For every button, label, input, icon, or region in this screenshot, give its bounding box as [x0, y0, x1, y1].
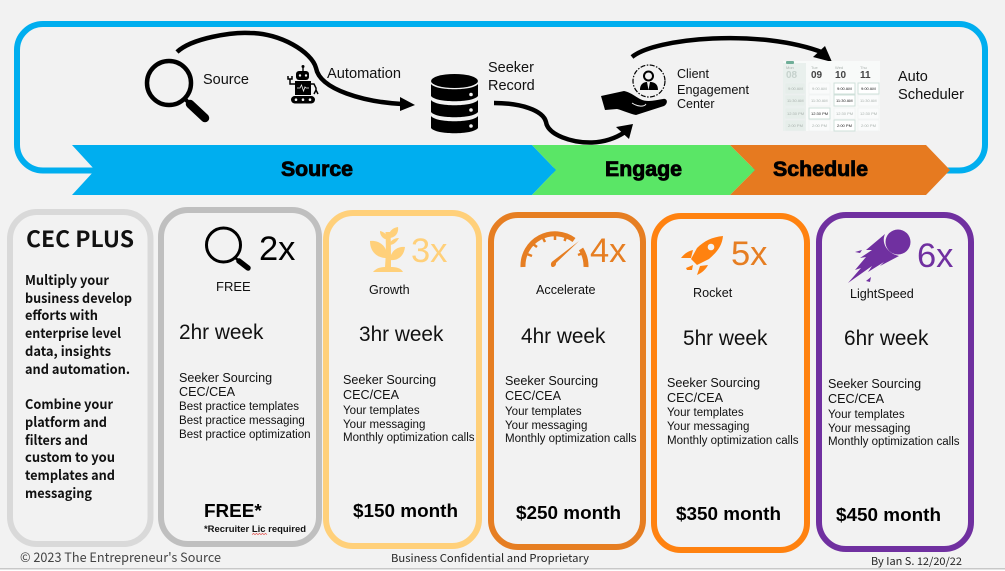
label: Auto Scheduler: Auto	[898, 69, 928, 85]
price: $250 month: $250 month	[516, 503, 621, 524]
icon: auto scheduler calendar: Wed	[835, 65, 843, 70]
label: Auto Scheduler	[898, 69, 964, 103]
icon: auto scheduler calendar: 12:30 PM	[811, 111, 828, 116]
feature list: Best practice messaging	[179, 415, 305, 427]
chevron: Engage	[532, 145, 755, 195]
label: Client Engagement Center: Center	[677, 97, 715, 111]
chevron: Source	[72, 145, 556, 195]
feature list	[828, 377, 960, 448]
hours: 2hr week: 2hr week	[179, 321, 264, 344]
feature list: Best practice optimization	[179, 429, 311, 441]
text: intro description: Multiply your	[25, 269, 109, 289]
price: FREE*: FREE*	[204, 501, 262, 522]
label: Automation: Automation	[327, 66, 401, 82]
feature list: Your templates	[667, 407, 744, 419]
icon: sprout	[370, 227, 405, 272]
icon: auto scheduler calendar: 08	[786, 70, 798, 81]
label: Seeker Record: Seeker	[488, 60, 534, 76]
feature list: Monthly optimization calls	[343, 432, 475, 444]
icon: seeker record database	[431, 74, 478, 133]
feature list: Seeker Sourcing	[828, 377, 921, 391]
icon: auto scheduler calendar: 12:30 PM	[787, 111, 804, 116]
panel: Accelerate tier	[491, 215, 643, 547]
feature list: Your templates	[828, 409, 905, 421]
feature list: Best practice templates	[179, 401, 299, 413]
multiplier: 3x: 3x	[411, 232, 447, 270]
icon: auto scheduler calendar: 2:00 PM	[812, 123, 827, 128]
icon: auto scheduler calendar: 12:30 PM	[836, 111, 853, 116]
icon: auto scheduler calendar: Tue	[811, 65, 819, 70]
text: intro description: efforts with	[25, 304, 98, 324]
tier name: Accelerate: Accelerate	[536, 283, 596, 297]
text: intro description: filters and	[25, 429, 88, 449]
icon: auto scheduler calendar: 2:00 PM	[837, 123, 852, 128]
panel: Rocket tier	[654, 216, 807, 550]
footer: copyright: © 2023 The Entrepreneur's Source	[20, 547, 221, 566]
label: Client Engagement Center	[677, 67, 750, 111]
icon: auto scheduler calendar: 10	[835, 70, 847, 81]
icon: auto scheduler calendar: 09	[811, 70, 823, 81]
icon: auto scheduler calendar: 11:30 AM	[836, 98, 853, 103]
icon: auto scheduler calendar: 9:00 AM	[788, 86, 803, 91]
icon: comet	[848, 230, 910, 283]
label: Client Engagement Center: Client	[677, 67, 709, 81]
panel: process flow frame	[17, 24, 985, 170]
feature list: Your messaging	[505, 420, 587, 432]
icon: auto scheduler calendar: 9:00 AM	[861, 86, 876, 91]
footer: author: By Ian S. 12/20/22	[871, 554, 962, 569]
feature list: Monthly optimization calls	[828, 436, 960, 448]
feature list: CEC/CEA	[179, 385, 236, 399]
multiplier: 2x: 2x	[259, 230, 295, 268]
note: recruiter license: *Recruiter Lic required	[204, 524, 306, 534]
panel: LightSpeed tier	[819, 215, 971, 549]
feature list: CEC/CEA	[505, 389, 562, 403]
icon: source magnifier	[147, 61, 205, 118]
feature list: Your templates	[343, 405, 420, 417]
label: Seeker Record: Record	[488, 78, 535, 94]
tier name: FREE: FREE	[216, 279, 251, 294]
multiplier: 4x: 4x	[590, 232, 626, 270]
feature list	[343, 373, 475, 444]
price: $350 month: $350 month	[676, 504, 781, 525]
price: $450 month: $450 month	[836, 505, 941, 526]
icon: auto scheduler calendar: 11:30 AM	[811, 98, 828, 103]
feature list	[667, 376, 799, 447]
chevron: Source: Source	[281, 158, 353, 181]
icon: speedometer gauge	[523, 234, 586, 267]
panel: CEC PLUS intro	[10, 212, 150, 544]
feature list: Seeker Sourcing	[343, 373, 436, 387]
text: intro description: enterprise level	[25, 322, 121, 342]
tier name: LightSpeed: LightSpeed	[850, 287, 914, 301]
text: intro description: platform and	[25, 411, 107, 431]
icon: magnifier	[206, 228, 248, 268]
label: Auto Scheduler: Scheduler	[898, 87, 964, 103]
icon: automation robot	[288, 65, 318, 104]
arrow: source to seeker record	[177, 33, 415, 111]
icon: auto scheduler calendar: 9:00 AM	[812, 86, 827, 91]
feature list	[179, 371, 311, 441]
footer: confidentiality: Business Confidential and Proprietary	[391, 550, 589, 566]
panel: FREE tier	[161, 210, 319, 544]
multiplier: 5x: 5x	[731, 235, 767, 273]
label: Client Engagement Center: Engagement	[677, 83, 750, 97]
hours: 3hr week: 3hr week	[359, 323, 444, 346]
panel: Growth tier	[326, 213, 479, 546]
icon: auto scheduler calendar: 11:30 AM	[860, 98, 877, 103]
label: Source: Source	[203, 72, 249, 88]
tier name: Growth: Growth	[369, 283, 410, 297]
text: intro description	[25, 269, 132, 502]
text: intro description: data, insights	[25, 340, 111, 360]
icon: auto scheduler calendar: 11:30 AM	[787, 98, 804, 103]
icon: auto scheduler calendar: 11	[860, 70, 871, 81]
feature list: Seeker Sourcing	[179, 371, 272, 385]
text: intro description: Combine your	[25, 393, 113, 413]
text: intro description: templates and	[25, 464, 115, 484]
icon: auto scheduler calendar: 12:30 PM	[860, 111, 877, 116]
multiplier: 6x: 6x	[917, 237, 953, 275]
feature list: Monthly optimization calls	[667, 435, 799, 447]
text: intro description: and automation.	[25, 358, 130, 378]
icon: auto scheduler calendar: Mon	[786, 65, 794, 70]
chevron: Schedule: Schedule	[773, 158, 868, 181]
hours: 5hr week: 5hr week	[683, 327, 768, 350]
feature list: Seeker Sourcing	[505, 374, 598, 388]
icon: auto scheduler calendar: 2:00 PM	[861, 123, 876, 128]
feature list: CEC/CEA	[667, 391, 724, 405]
arrow: seeker record to client engagement center	[494, 103, 633, 143]
icon: auto scheduler calendar	[783, 61, 880, 131]
hours: 4hr week: 4hr week	[521, 325, 606, 348]
feature list: Your templates	[505, 406, 582, 418]
feature list: Your messaging	[828, 423, 910, 435]
icon: rocket	[681, 236, 723, 275]
label: Seeker Record	[488, 60, 535, 94]
text: intro description: business develop	[25, 287, 132, 307]
text: intro description: custom to you	[25, 446, 115, 466]
feature list: Your messaging	[667, 421, 749, 433]
feature list: CEC/CEA	[343, 388, 400, 402]
icon: auto scheduler calendar: 2:00 PM	[788, 123, 803, 128]
feature list	[505, 374, 637, 445]
arrow: client engagement center to auto scheduler	[632, 38, 832, 62]
tier name: Rocket: Rocket	[693, 286, 733, 300]
chevron: Engage: Engage	[605, 158, 682, 181]
feature list: Your messaging	[343, 419, 425, 431]
price: $150 month: $150 month	[353, 501, 458, 522]
hours: 6hr week: 6hr week	[844, 327, 929, 350]
feature list: CEC/CEA	[828, 392, 885, 406]
icon: client engagement center hand and person	[601, 65, 667, 115]
icon: auto scheduler calendar: Thu	[860, 65, 867, 70]
feature list: Seeker Sourcing	[667, 376, 760, 390]
icon: auto scheduler calendar: 9:00 AM	[837, 86, 852, 91]
feature list: Monthly optimization calls	[505, 433, 637, 445]
chevron: Schedule	[730, 145, 950, 195]
heading: CEC PLUS: CEC PLUS	[26, 222, 134, 254]
text: intro description: messaging	[25, 482, 92, 502]
